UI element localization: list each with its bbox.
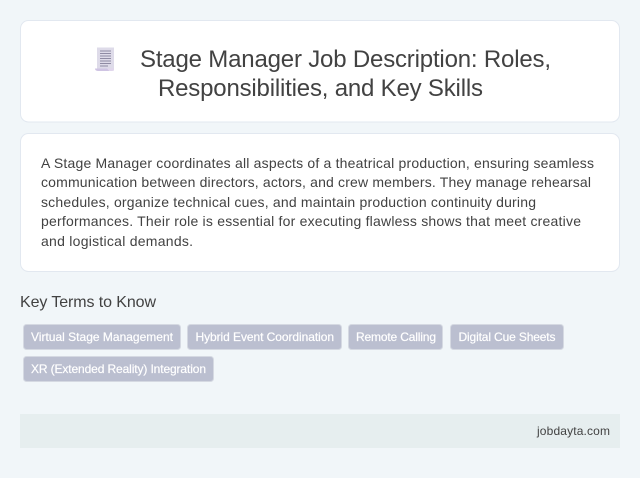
tag: Digital Cue Sheets: Digital Cue Sheets [458, 330, 556, 344]
title: Responsibilities, and Key Skills [158, 75, 483, 102]
heading: key terms: Key Terms to Know [20, 294, 156, 311]
description text: schedules, organize technical cues, and maintain production continuity during [41, 194, 536, 210]
panel: title card [20, 20, 620, 122]
description text: and logistical demands. [41, 233, 193, 249]
tag: Virtual Stage Management [24, 324, 180, 350]
tag: Hybrid Event Coordination [188, 324, 342, 350]
tags [24, 324, 564, 382]
tag: Remote Calling: Remote Calling [356, 330, 436, 344]
tag: Hybrid Event Coordination: Hybrid Event Coordination [196, 330, 334, 344]
footer [20, 414, 620, 448]
tag: Remote Calling [348, 324, 442, 350]
panel: description [20, 134, 620, 272]
description text [41, 155, 594, 249]
tag: XR (Extended Reality) Integration [24, 356, 214, 382]
description text: communication between directors, actors, and crew members. They manage rehearsal [41, 174, 591, 190]
description text: A Stage Manager coordinates all aspects of a theatrical production, ensuring seamless [41, 155, 594, 171]
description text: performances. Their role is essential for executing flawless shows that meet creative [41, 213, 581, 229]
title [140, 46, 551, 102]
icon: document scroll [95, 48, 114, 71]
tag: Virtual Stage Management: Virtual Stage Management [31, 330, 174, 344]
title: Stage Manager Job Description: Roles, [140, 46, 551, 73]
tag: Digital Cue Sheets [450, 324, 564, 350]
tag: XR (Extended Reality) Integration: XR (Extended Reality) Integration [31, 362, 206, 376]
footer: jobdayta.com [536, 424, 610, 438]
